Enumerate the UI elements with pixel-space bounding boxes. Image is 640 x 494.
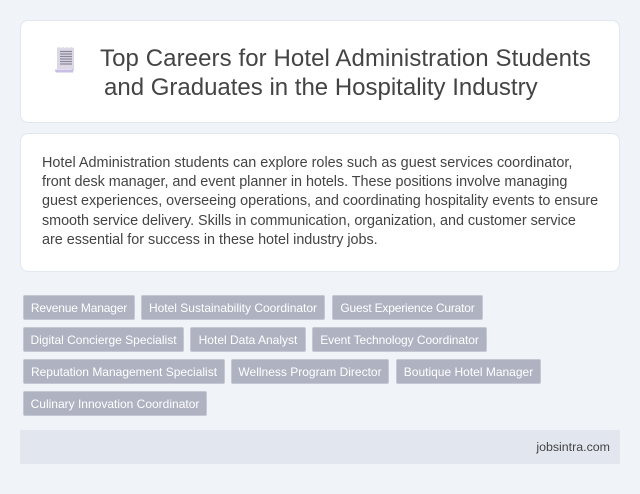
tag group: career roles [23, 295, 541, 416]
tag: Boutique Hotel Manager [404, 365, 533, 379]
tag [312, 327, 487, 352]
heading: Top Careers for Hotel Administration Students [100, 45, 591, 72]
tag: Culinary Innovation Coordinator [31, 397, 199, 411]
tag [396, 359, 541, 384]
description text: front desk manager, and event planner in hotels. These positions involve managing [42, 174, 567, 190]
tag: Reputation Management Specialist [31, 365, 217, 379]
description text: Hotel Administration students can explore roles such as guest services coordinator, [42, 155, 572, 171]
tag: Digital Concierge Specialist [30, 333, 177, 347]
panel: title card [20, 20, 620, 123]
tag [23, 295, 135, 320]
description text: are essential for success in these hotel industry jobs. [42, 232, 378, 248]
tag: Hotel Data Analyst [199, 333, 297, 347]
tag: Wellness Program Director [238, 365, 382, 379]
heading: and Graduates in the Hospitality Industry [104, 74, 538, 101]
tag: Hotel Sustainability Coordinator [149, 301, 317, 315]
tag [23, 391, 207, 416]
tag: Event Technology Coordinator [320, 333, 479, 347]
tag [231, 359, 389, 384]
footer source text: jobsintra.com [536, 440, 610, 454]
tag [190, 327, 306, 352]
icon: document scroll [55, 47, 74, 72]
tag: Revenue Manager [31, 301, 127, 315]
tag [23, 327, 184, 352]
description text [42, 155, 598, 248]
footer bar [20, 430, 620, 464]
tag [141, 295, 325, 320]
tag [23, 359, 225, 384]
description text: smooth service delivery. Skills in communication, organization, and customer service [42, 213, 576, 229]
heading [100, 45, 591, 101]
tag: Guest Experience Curator [340, 301, 475, 315]
tag [332, 295, 483, 320]
panel: description card [20, 133, 620, 272]
description text: guest experiences, overseeing operations, and coordinating hospitality events to ensure [42, 193, 598, 209]
